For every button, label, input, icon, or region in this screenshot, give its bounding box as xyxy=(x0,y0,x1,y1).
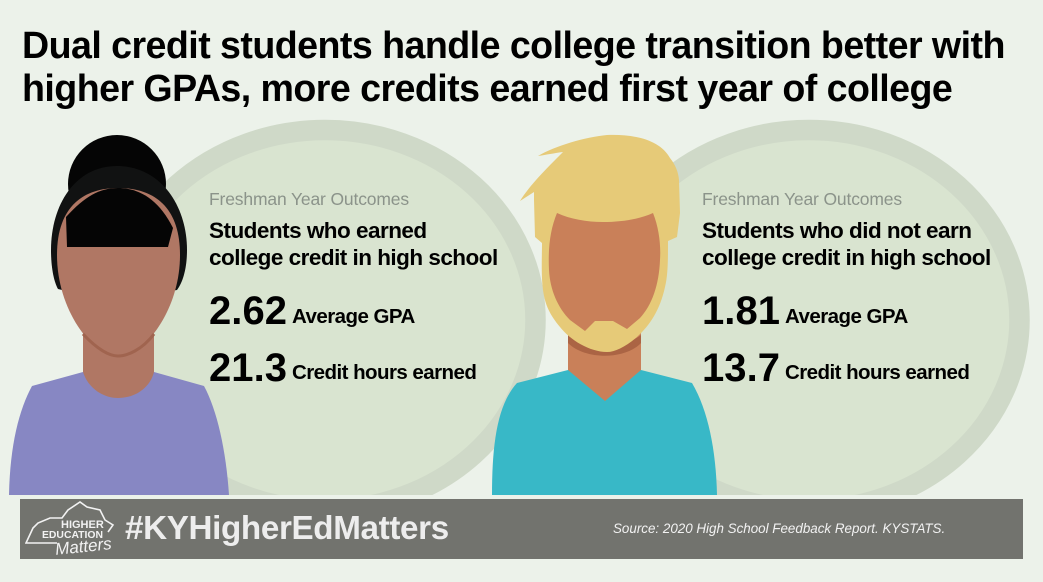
heading: earned credit: Students who earned xyxy=(209,218,427,243)
stat: credit hours: 21.3 xyxy=(209,346,287,390)
logo: Higher Education Matters: Matters xyxy=(54,534,113,559)
panel text: dual credit students xyxy=(209,189,498,390)
panel circle: non dual credit students xyxy=(598,130,1020,510)
stat: GPA xyxy=(209,289,415,333)
figure: male student xyxy=(492,135,717,495)
stat: credit hours xyxy=(209,346,476,390)
stat: GPA: Average GPA xyxy=(785,305,908,328)
stat: GPA: 2.62 xyxy=(209,289,287,333)
logo: Higher Education Matters: HIGHER xyxy=(61,519,104,531)
hashtag: #KYHigherEdMatters xyxy=(125,510,449,547)
stat: GPA xyxy=(702,289,908,333)
stat: credit hours: Credit hours earned xyxy=(785,361,969,384)
heading: did not earn credit: Students who did not earn xyxy=(702,218,972,243)
label: freshman outcomes: Freshman Year Outcomes xyxy=(702,189,902,209)
heading: did not earn credit xyxy=(702,218,991,270)
stat: credit hours xyxy=(702,346,969,390)
figure: female student xyxy=(9,135,229,495)
source: Source: 2020 High School Feedback Report. KYSTATS. xyxy=(613,521,945,536)
panel text: non dual credit students xyxy=(702,189,991,390)
logo: Higher Education Matters xyxy=(25,501,114,559)
logo: Higher Education Matters: EDUCATION xyxy=(42,530,103,541)
stat: credit hours: Credit hours earned xyxy=(292,361,476,384)
footer bar xyxy=(20,499,1023,559)
panel circle: dual credit students xyxy=(114,130,536,510)
stat: GPA: 1.81 xyxy=(702,289,780,333)
title: higher GPAs, more credits earned first year of college xyxy=(22,67,952,109)
illustrations: circles and student figures xyxy=(9,120,1030,495)
heading: did not earn credit: college credit in high school xyxy=(702,244,991,270)
label: freshman outcomes: Freshman Year Outcomes xyxy=(209,189,409,209)
stat: GPA: Average GPA xyxy=(292,305,415,328)
stat: credit hours: 13.7 xyxy=(702,346,780,390)
title xyxy=(22,24,1005,109)
heading: earned credit xyxy=(209,218,498,270)
title: Dual credit students handle college transition better with xyxy=(22,24,1005,66)
heading: earned credit: college credit in high school xyxy=(209,244,498,270)
